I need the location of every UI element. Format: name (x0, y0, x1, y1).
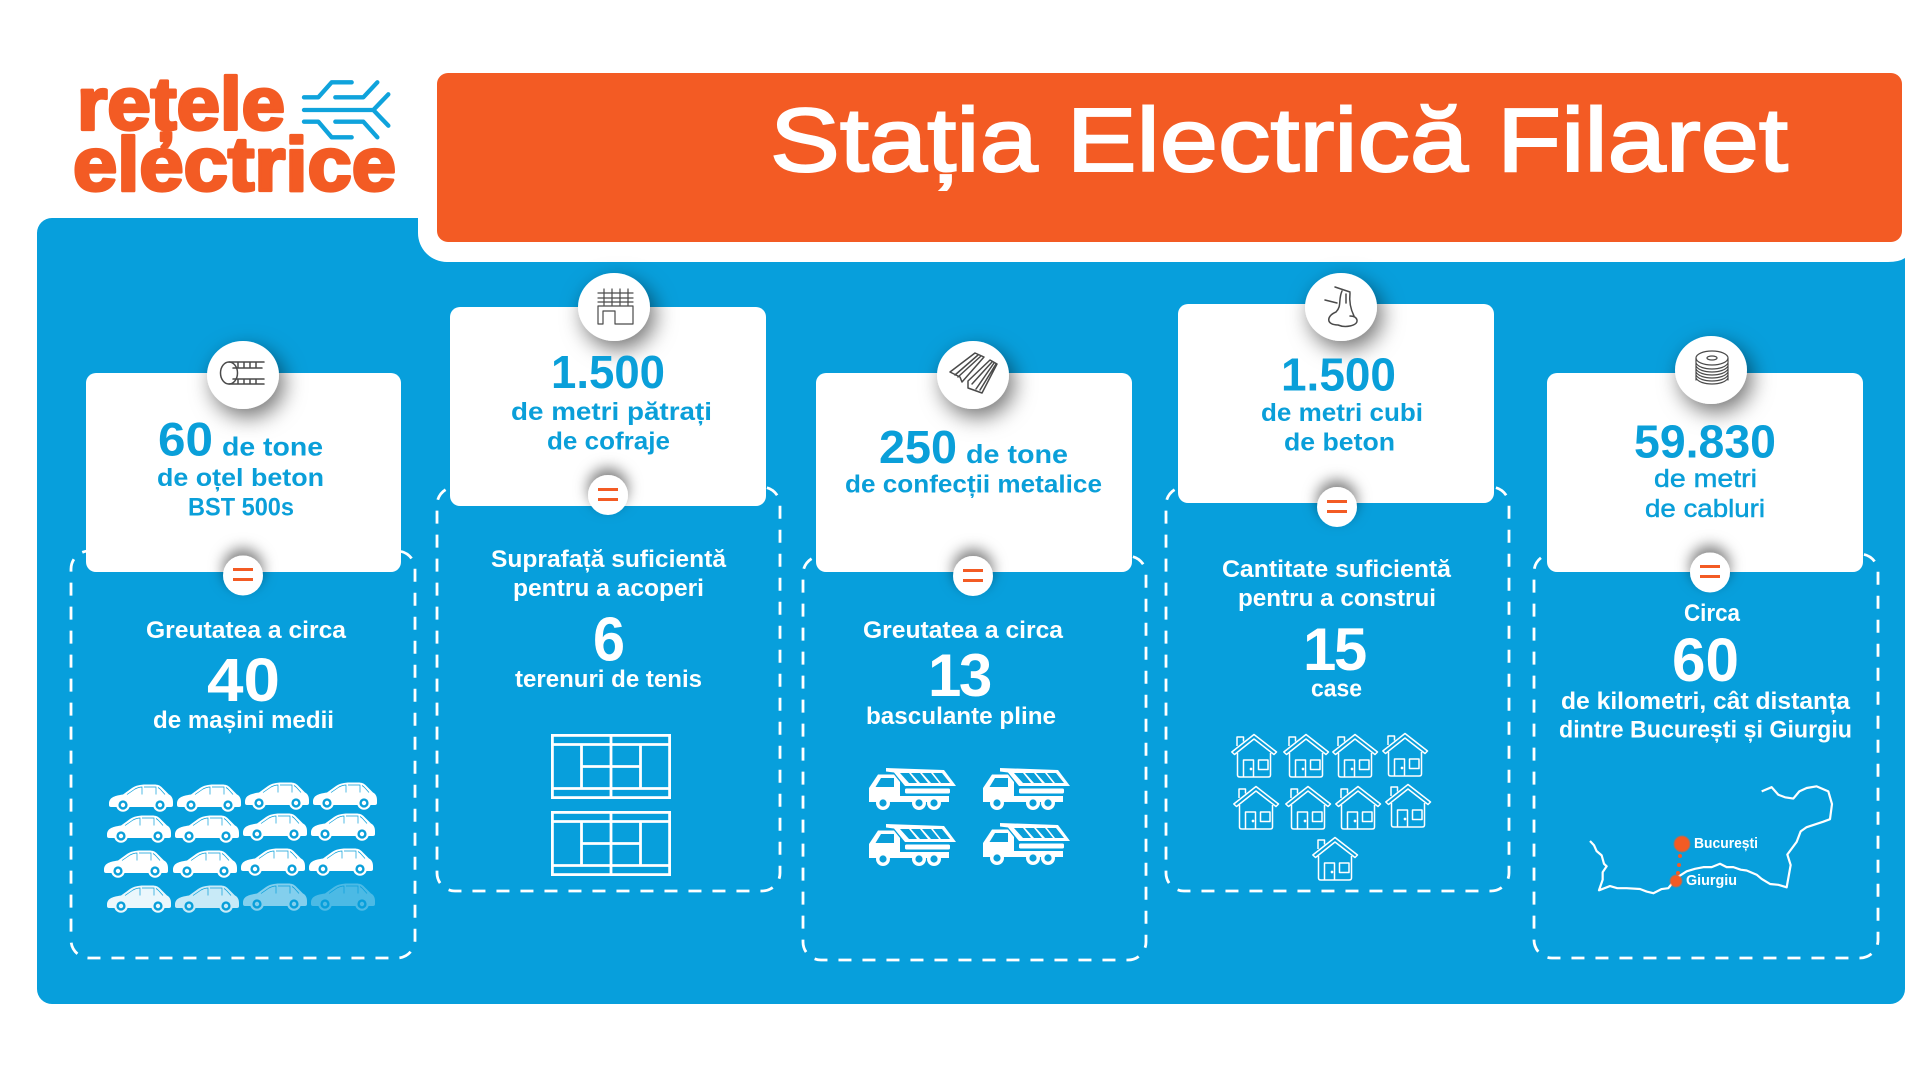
comparison text: pentru a construi (1238, 585, 1436, 612)
icons: tennis courts (552, 735, 670, 875)
white stat card (1178, 304, 1494, 503)
icon: concrete pour (1305, 273, 1377, 341)
stat text: 1.500 (1281, 348, 1396, 400)
equals badge (223, 556, 263, 596)
logo icon: power lines (304, 82, 388, 137)
map outline (1590, 786, 1832, 893)
comparison text (491, 546, 727, 693)
comparison text: Suprafață suficientă (491, 546, 727, 573)
panel: steel (71, 341, 415, 958)
stat text (511, 346, 712, 456)
icon: cable spool (1675, 336, 1747, 404)
panel: cables (1534, 336, 1878, 958)
marker: București: București (1694, 835, 1758, 852)
stat text: de oțel beton (157, 464, 324, 492)
icons: cars (104, 782, 377, 913)
panel: formwork (437, 273, 780, 891)
white stat card (1547, 373, 1863, 572)
comparison text (1559, 600, 1852, 744)
comparison text: case (1311, 676, 1362, 702)
white stat card (816, 373, 1132, 572)
stat text: 250 (879, 421, 957, 473)
comparison text: 60 (1672, 626, 1739, 694)
stat text (845, 421, 1102, 498)
stat text (1261, 348, 1423, 456)
logo wordmark (73, 62, 396, 208)
stat text: de metri (1654, 465, 1757, 493)
comparison text: de mașini medii (153, 707, 334, 734)
comparison text: terenuri de tenis (515, 666, 702, 693)
panel: metal structures (803, 341, 1146, 960)
title banner (437, 73, 1902, 242)
comparison text: 6 (593, 606, 625, 674)
route dots (1676, 854, 1682, 875)
comparison text: Cantitate suficientă (1222, 556, 1452, 583)
stat text: de tone (222, 432, 323, 462)
logo: Rețele Electrice (73, 62, 396, 208)
equals badge (1690, 552, 1730, 592)
comparison text: 40 (207, 646, 280, 714)
stat text: de beton (1284, 428, 1395, 456)
marker: Giurgiu: Giurgiu (1686, 872, 1737, 889)
stat text: de cofraje (547, 428, 670, 456)
stat text: 1.500 (551, 346, 665, 398)
comparison text: Greutatea a circa (863, 617, 1064, 644)
icon: metal sheets (937, 341, 1009, 409)
comparison text (1222, 556, 1452, 702)
comparison text: 13 (928, 642, 991, 709)
white stat card (450, 307, 766, 506)
dashed comparison frame (437, 487, 780, 891)
white stat card (86, 373, 401, 572)
logo wordmark: rețele (77, 62, 285, 146)
comparison text: basculante pline (866, 703, 1056, 730)
dashed comparison frame (71, 551, 415, 958)
map: Bucharest to Giurgiu (1590, 786, 1832, 893)
icon: rebar (207, 341, 279, 409)
stat text: de cabluri (1645, 495, 1765, 523)
equals badge (953, 556, 993, 596)
stat text: de metri pătrați (511, 398, 712, 426)
panel: concrete (1166, 273, 1509, 891)
icons: houses (1232, 734, 1430, 880)
comparison text: Greutatea a circa (146, 617, 347, 644)
equals badge (1317, 487, 1357, 527)
logo wordmark: electrice (73, 122, 396, 208)
comparison text: 15 (1303, 616, 1366, 683)
title: Stația Electrică Filaret (770, 91, 1788, 191)
comparison text: Circa (1684, 600, 1741, 627)
stat text: BST 500s (188, 494, 294, 522)
stat text: 60 (158, 412, 213, 466)
comparison text: de kilometri, cât distanța (1561, 688, 1851, 715)
icons: dump trucks (869, 768, 1070, 866)
comparison text: dintre București și Giurgiu (1559, 716, 1852, 744)
dashed comparison frame (803, 556, 1146, 960)
stat text: de metri cubi (1261, 399, 1423, 427)
stat text (1634, 416, 1776, 523)
stat text: de tone (966, 439, 1068, 469)
blue background panel (37, 218, 1905, 1004)
dashed comparison frame (1166, 487, 1509, 891)
dashed comparison frame (1534, 554, 1878, 958)
stat text (157, 412, 324, 522)
comparison text (146, 617, 347, 734)
stat text: 59.830 (1634, 416, 1776, 468)
comparison text (863, 617, 1064, 730)
comparison text: pentru a acoperi (513, 575, 704, 602)
icon: formwork (578, 273, 650, 341)
stat text: de confecții metalice (845, 470, 1102, 498)
equals badge (588, 475, 628, 515)
